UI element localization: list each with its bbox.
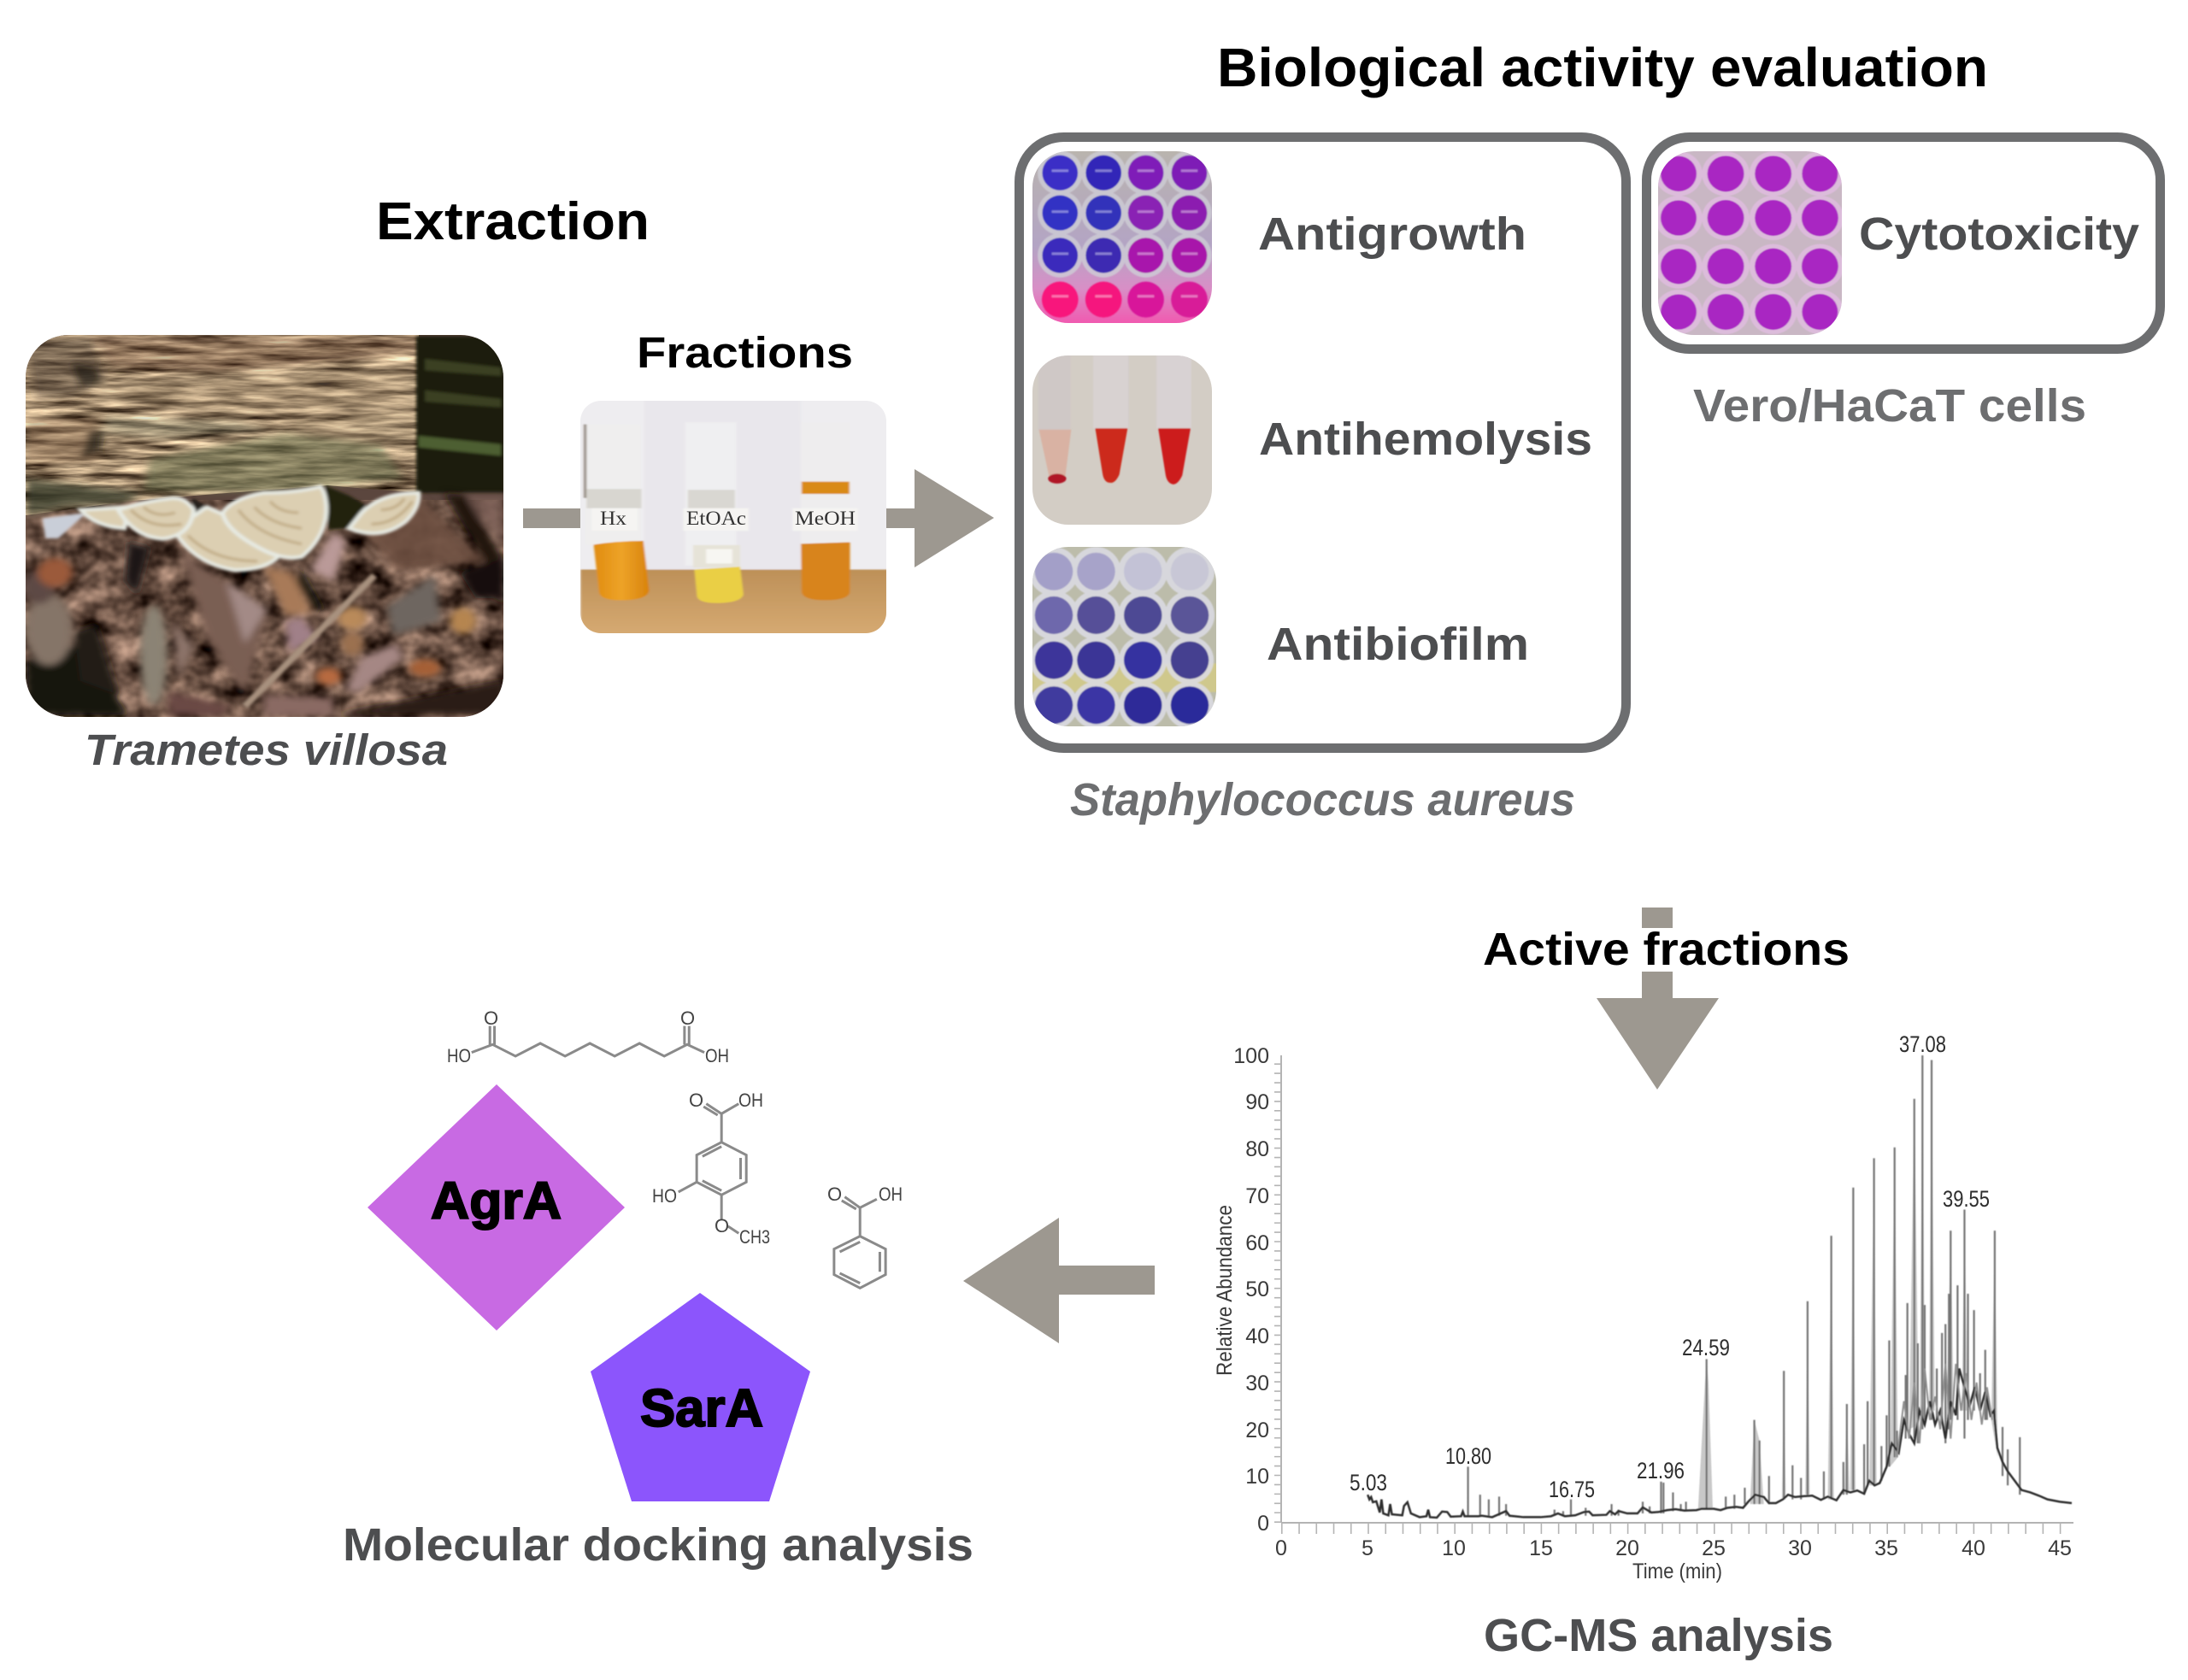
molecule: vanillic acid: O: [715, 1215, 729, 1237]
hump zigzag: [1897, 1364, 1992, 1457]
chart: GC-MS chromatogram: [1213, 1031, 2073, 1583]
baseline: [1368, 1368, 2072, 1518]
peak envelopes: [1698, 1055, 1997, 1509]
caption: GC-MS analysis: GC-MS analysis: [1484, 1610, 1833, 1661]
heading: Extraction: Extraction: [376, 192, 650, 251]
photo: Trametes villosa on bark: [23, 335, 505, 717]
tube: methanol: [800, 480, 851, 601]
photo: fractions in test tubes: [580, 400, 888, 635]
peak retention time labels: 21.96: [1637, 1458, 1685, 1483]
photo: MTT plate: [1655, 151, 1844, 335]
photo: fractions in test tubes: MeOH: [795, 508, 856, 529]
y axis tick labels: 20: [1245, 1419, 1269, 1442]
heading: Fractions: Fractions: [637, 328, 853, 377]
label: Antigrowth: Antigrowth: [1258, 209, 1526, 260]
molecule: vanillic acid: OH: [738, 1090, 763, 1111]
x axis tick labels: 40: [1962, 1536, 1985, 1560]
label: Antibiofilm: Antibiofilm: [1267, 619, 1529, 670]
y axis title: Relative Abundance: [1213, 1205, 1237, 1376]
caption: Molecular docking analysis: Molecular docking analysis: [343, 1519, 973, 1571]
molecule: azelaic acid: O: [484, 1007, 498, 1029]
molecule: azelaic acid: [447, 1007, 729, 1066]
heading: Active fractions: Active fractions: [1483, 924, 1850, 975]
y axis tick labels: 100: [1233, 1044, 1269, 1068]
x axis tick labels: 35: [1874, 1536, 1898, 1560]
panel frame: [1646, 137, 2161, 349]
peak retention time labels: [1350, 1031, 1990, 1502]
label: Cytotoxicity: Cytotoxicity: [1859, 209, 2139, 260]
x axis tick labels: 5: [1362, 1536, 1373, 1560]
peak retention time labels: 37.08: [1899, 1031, 1946, 1057]
y axis tick labels: 60: [1245, 1231, 1269, 1255]
molecule: benzoic acid: OH: [879, 1184, 903, 1205]
label: AgrA: AgrA: [431, 1172, 562, 1230]
axes and ticks: [1278, 1055, 2073, 1528]
diamond: [368, 1084, 625, 1330]
peak retention time labels: 5.03: [1350, 1470, 1387, 1495]
y axis tick labels: 50: [1245, 1278, 1269, 1301]
peak retention time labels: 10.80: [1445, 1443, 1491, 1469]
y axis tick labels: 0: [1257, 1512, 1269, 1536]
caption: Vero/HaCaT cells: Vero/HaCaT cells: [1693, 380, 2086, 432]
molecule: azelaic acid: O: [680, 1007, 695, 1029]
label: SarA: SarA: [640, 1379, 763, 1438]
caption: Trametes villosa: Trametes villosa: [85, 725, 448, 774]
peak retention time labels: 24.59: [1682, 1335, 1730, 1360]
molecule: azelaic acid: OH: [705, 1045, 729, 1066]
x axis tick labels: 15: [1529, 1536, 1553, 1560]
chromatogram trace: [1368, 1055, 2072, 1518]
x axis tick labels: 25: [1702, 1536, 1726, 1560]
y axis tick labels: 90: [1245, 1090, 1269, 1114]
photo: antibiofilm crystal violet plate: [1029, 547, 1224, 729]
sticks: [1468, 1055, 2020, 1516]
tube: ethyl acetate: [687, 490, 744, 603]
arrow: biological evaluation down to GC-MS: [1597, 908, 1719, 1090]
x axis tick labels: 10: [1442, 1536, 1466, 1560]
shape: AgrA target: [368, 1084, 625, 1330]
y axis tick labels: 70: [1245, 1184, 1269, 1208]
y axis tick labels: 30: [1245, 1372, 1269, 1395]
pentagon: [591, 1293, 810, 1501]
molecule: vanillic acid: HO: [652, 1185, 677, 1207]
molecule: azelaic acid: HO: [447, 1045, 471, 1066]
arrow: GC-MS to molecular docking: [963, 1218, 1155, 1343]
label: Antihemolysis: Antihemolysis: [1259, 414, 1592, 465]
shape: SarA target: [591, 1293, 810, 1501]
photo: antihemolysis tubes: [1032, 355, 1212, 525]
photo: fractions in test tubes: EtOAc: [686, 508, 746, 529]
y axis tick labels: 80: [1245, 1137, 1269, 1161]
x axis tick labels: 45: [2048, 1536, 2072, 1560]
molecule: vanillic acid: [652, 1090, 770, 1248]
y axis tick labels: [1233, 1044, 1269, 1536]
x axis title: Time (min): [1632, 1560, 1722, 1583]
x axis tick labels: 30: [1788, 1536, 1812, 1560]
tube: hexane: [585, 425, 650, 601]
arrow: extraction to biological evaluation: [523, 469, 994, 567]
peak retention time labels: 39.55: [1943, 1186, 1990, 1212]
panel frame: [1019, 137, 1626, 749]
molecule: benzoic acid: [827, 1184, 903, 1288]
molecule: vanillic acid: O: [689, 1090, 703, 1111]
x axis tick labels: 20: [1615, 1536, 1639, 1560]
x axis tick labels: 0: [1275, 1536, 1287, 1560]
peak retention time labels: 16.75: [1549, 1477, 1595, 1502]
molecule: vanillic acid: CH3: [739, 1226, 770, 1248]
y axis tick labels: 10: [1245, 1465, 1269, 1489]
heading: Biological activity evaluation: Biological activity evaluation: [1217, 37, 1988, 98]
panel: Vero/HaCaT cytotoxicity: [1646, 137, 2161, 349]
caption: Staphylococcus aureus: Staphylococcus aureus: [1070, 774, 1575, 825]
photo: fractions in test tubes: Hx: [600, 508, 627, 529]
x axis tick labels: [1275, 1536, 2072, 1560]
molecule: benzoic acid: O: [827, 1184, 842, 1205]
panel: Staphylococcus aureus assays: [1019, 137, 1626, 749]
y axis tick labels: 40: [1245, 1325, 1269, 1348]
photo: antigrowth resazurin plate: [1032, 150, 1212, 323]
